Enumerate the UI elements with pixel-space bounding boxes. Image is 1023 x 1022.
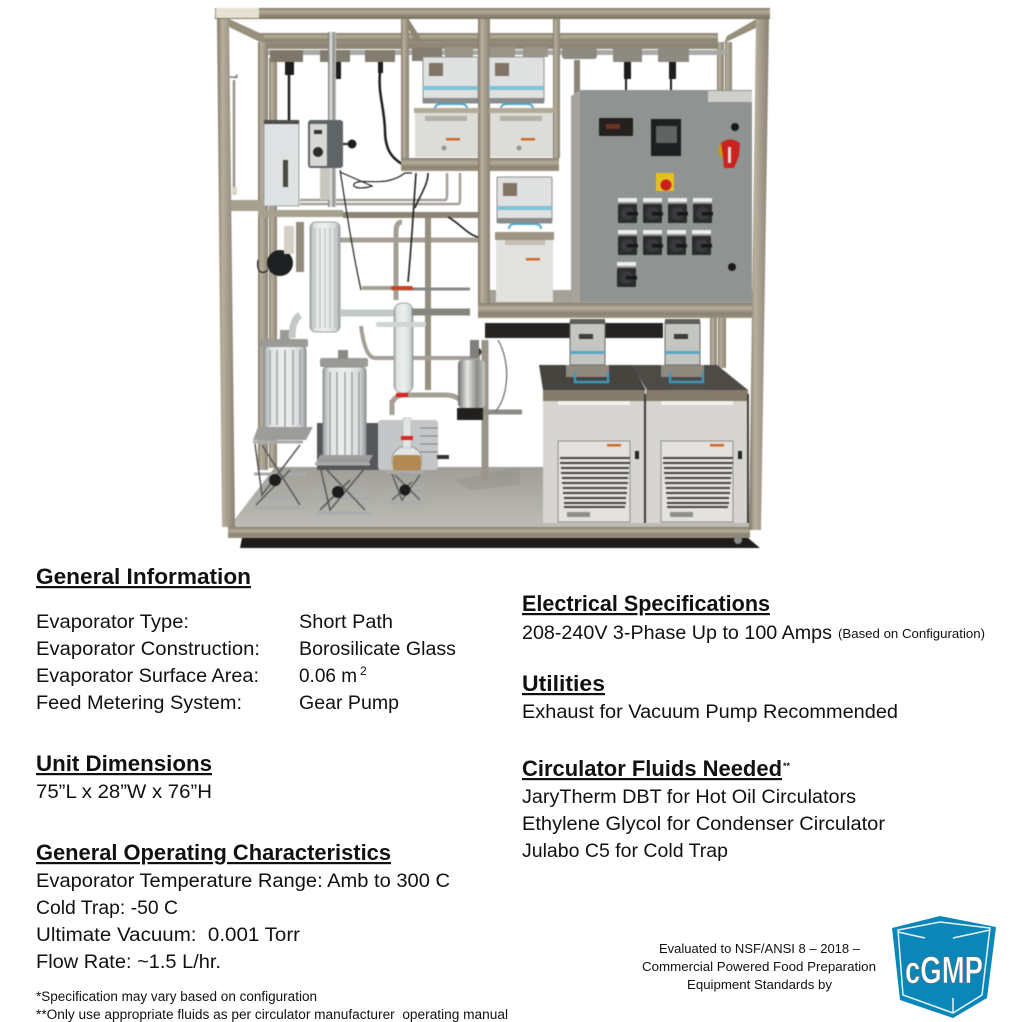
electrical note: (Based on Configuration) [838, 627, 985, 641]
footnotes [36, 989, 508, 1022]
front frame [215, 8, 770, 530]
spec values [299, 612, 456, 714]
icon: cGMP logo [892, 916, 996, 1018]
icon: cGMP logo: cGMP [905, 950, 983, 992]
gear pump [258, 222, 304, 276]
certification statement: Equipment Standards by [687, 977, 832, 992]
panel: circulator fluids needed [522, 756, 886, 862]
lower shelf [478, 290, 756, 318]
panel: electrical specifications [522, 591, 985, 644]
panel: general operating characteristics [36, 840, 450, 973]
operating values: Evaporator Temperature Range: Amb to 300 C [36, 871, 450, 892]
footnote marker: ** [783, 761, 791, 771]
operating values [36, 871, 450, 973]
heading: electrical specifications: Electrical Specifications [522, 591, 770, 616]
feed and residue glass vessels [260, 330, 379, 470]
conduit with junction boxes and power cords [268, 47, 726, 164]
footnotes: *Specification may vary based on configuration [36, 989, 317, 1004]
spec values: 0.06 m [299, 666, 357, 687]
dimensions value: 75”L x 28”W x 76”H [36, 782, 212, 803]
spec labels: Evaporator Type: [36, 612, 189, 633]
lab jacks [253, 427, 425, 513]
certification statement: Evaluated to NSF/ANSI 8 – 2018 – [659, 941, 861, 956]
spec labels: Feed Metering System: [36, 693, 242, 714]
spec labels [36, 612, 260, 714]
heading: utilities: Utilities [522, 671, 605, 696]
fluids list: Julabo C5 for Cold Trap [522, 841, 728, 862]
electrical value: 208-240V 3-Phase Up to 100 Amps [522, 623, 832, 644]
heading: general information: General Information [36, 564, 251, 589]
operating values: Cold Trap: -50 C [36, 898, 178, 919]
circulators on upper shelf [414, 57, 554, 157]
operating values: Flow Rate: ~1.5 L/hr. [36, 952, 221, 973]
heading: circulator fluids: Circulator Fluids Needed [522, 756, 782, 781]
fluids list: JaryTherm DBT for Hot Oil Circulators [522, 787, 856, 808]
spec values: Short Path [299, 612, 393, 633]
upper shelf [401, 158, 559, 171]
wiped film glass body [292, 222, 470, 397]
heading: unit dimensions: Unit Dimensions [36, 751, 212, 776]
circulator on lower shelf [495, 177, 554, 302]
machine photo: short path evaporator skid [215, 8, 770, 548]
certification statement: Commercial Powered Food Preparation [642, 959, 876, 974]
mid frame posts [401, 18, 560, 303]
panel: general information [36, 564, 456, 714]
spec values: Gear Pump [299, 693, 399, 714]
fluids list [522, 787, 886, 862]
panel: utilities [522, 671, 898, 723]
mixer drive [308, 32, 412, 290]
metering cylinder and rod [226, 75, 299, 206]
vacuum pump and flask [378, 418, 449, 474]
certification statement [642, 941, 876, 992]
utilities value: Exhaust for Vacuum Pump Recommended [522, 702, 898, 723]
chillers [539, 319, 749, 523]
black hose [485, 323, 663, 338]
spec values: 2 [360, 664, 367, 678]
control panel [571, 90, 752, 302]
heading: operating characteristics: General Operating Characteristics [36, 840, 391, 865]
back frame [227, 18, 760, 470]
fluids list: Ethylene Glycol for Condenser Circulator [522, 814, 886, 835]
spec labels: Evaporator Construction: [36, 639, 260, 660]
panel: unit dimensions [36, 751, 212, 803]
operating values: Ultimate Vacuum: 0.001 Torr [36, 925, 301, 946]
spec values: Borosilicate Glass [299, 639, 456, 660]
vertical process piping [228, 173, 485, 480]
cold trap [457, 340, 522, 420]
footnotes: **Only use appropriate fluids as per circulator manufacturer operating manual [36, 1007, 508, 1022]
spec labels: Evaporator Surface Area: [36, 666, 259, 687]
base platform [228, 467, 760, 548]
